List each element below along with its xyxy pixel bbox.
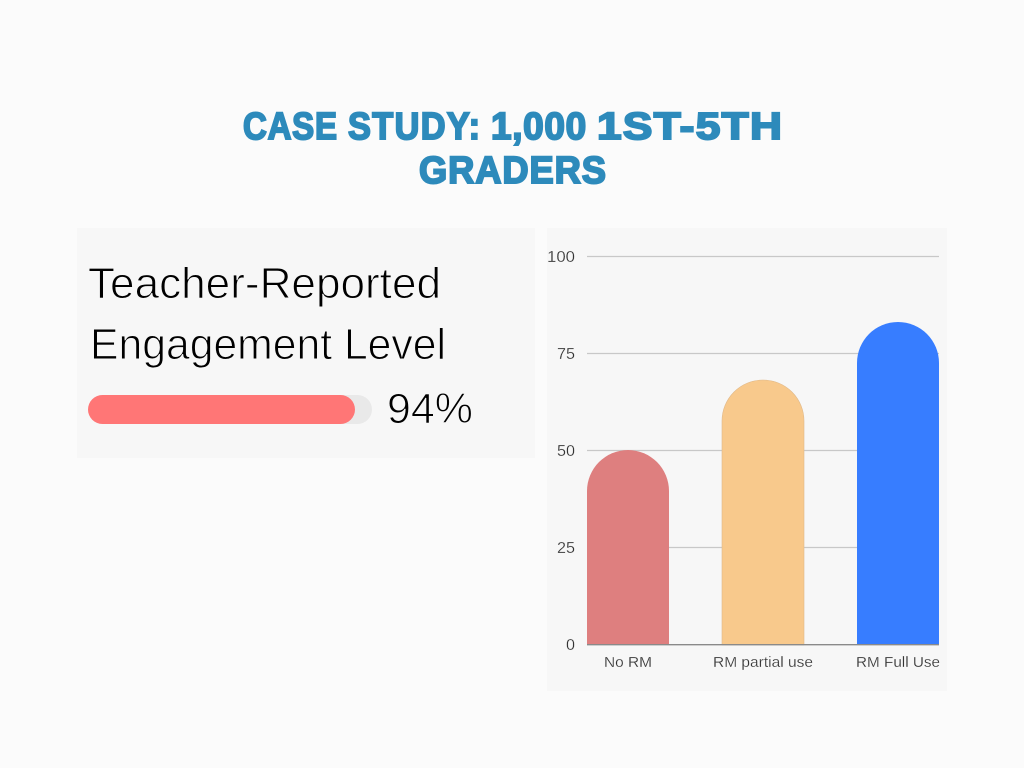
- x axis labels: [604, 654, 940, 671]
- chart grid lines: [587, 256, 939, 548]
- title: GRADERS: [419, 149, 606, 191]
- value: 94%: 94%: [387, 385, 473, 433]
- progress bar: 94%: [88, 395, 372, 424]
- title: 1,000: [491, 105, 586, 147]
- title: STUDY:: [348, 105, 480, 147]
- panel: teacher-reported engagement: [77, 228, 535, 458]
- y axis labels: 100: [547, 249, 575, 266]
- y axis labels: 0: [566, 637, 575, 654]
- bar: RM partial use: [722, 380, 804, 645]
- title: 1ST-5TH: [597, 105, 782, 147]
- y axis labels: 50: [557, 443, 575, 460]
- y axis labels: 25: [557, 540, 575, 557]
- title: CASE: [243, 106, 337, 148]
- y axis labels: [547, 249, 575, 654]
- x axis labels: No RM: [604, 654, 652, 671]
- x axis labels: RM partial use: [713, 654, 813, 671]
- x axis line: [587, 644, 939, 646]
- bar: No RM: [587, 450, 669, 645]
- heading: engagement level: Teacher-Reported: [88, 259, 441, 308]
- x axis labels: RM Full Use: [856, 654, 940, 671]
- title: [243, 105, 782, 191]
- panel: bar chart: [547, 228, 947, 691]
- bar: RM Full Use: [857, 322, 939, 645]
- heading: engagement level: [88, 259, 446, 369]
- y axis labels: 75: [557, 346, 575, 363]
- heading: engagement level: Engagement Level: [90, 320, 446, 369]
